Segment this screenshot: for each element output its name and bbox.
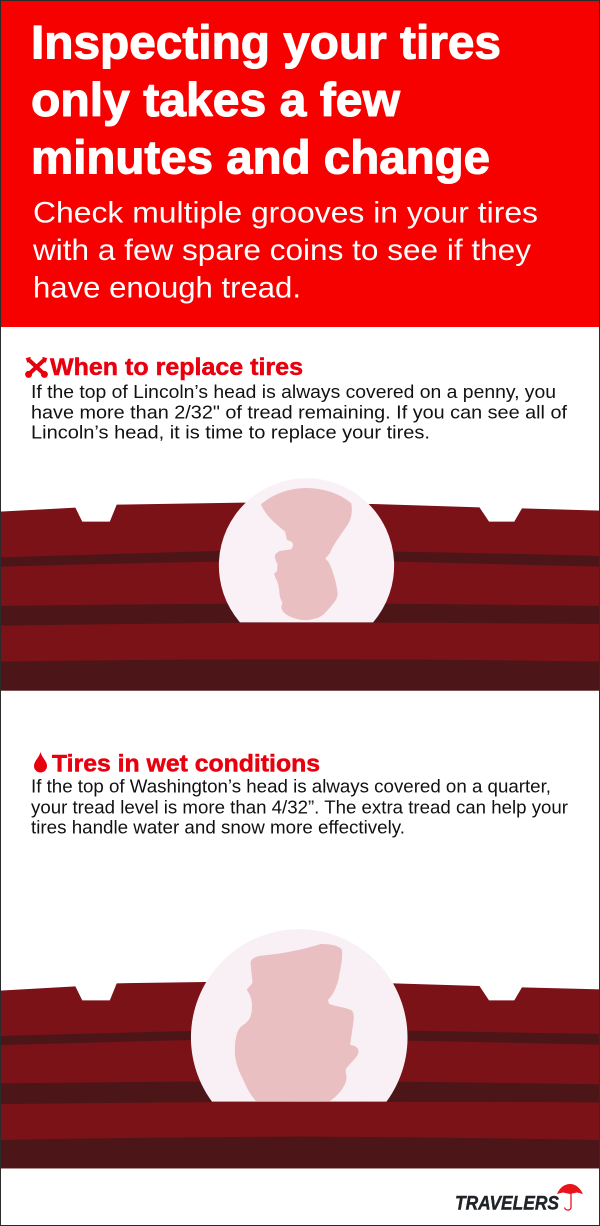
subtitle: [32, 197, 538, 304]
heading: tires in wet conditions: Tires in wet conditions: [52, 751, 320, 778]
body text: penny test: [31, 382, 568, 442]
coin: quarter: [191, 929, 408, 1102]
body text: penny test: Lincoln’s head, it is time to replace your tires.: [31, 422, 430, 442]
icon: crossed tools: [26, 358, 46, 376]
coin head: Lincoln: [261, 488, 352, 620]
illustration: penny in tire tread: [0, 478, 600, 691]
body text: quarter test: your tread level is more than 4/32”. The extra tread can help your: [31, 797, 568, 817]
tire groove: bottom: [0, 1137, 600, 1168]
tire body: [0, 503, 600, 691]
subtitle: with a few spare coins to see if they: [32, 234, 531, 267]
body text: quarter test: tires handle water and snow more effectively.: [31, 818, 405, 838]
tire groove: middle: [0, 1081, 600, 1104]
title: only takes a few: [31, 73, 400, 126]
icon: red umbrella: [557, 1184, 583, 1210]
tire groove: middle: [0, 603, 600, 626]
coin head: Washington: [235, 944, 359, 1102]
tire groove: thin: [0, 1031, 600, 1045]
title: minutes and change: [31, 130, 490, 184]
tire body: [0, 982, 600, 1168]
logo wordmark: TRAVELERS: [455, 1192, 559, 1214]
body text: penny test: If the top of Lincoln’s head is always covered on a penny, you: [31, 382, 556, 402]
header panel: [0, 0, 600, 327]
logo: Travelers: [455, 1184, 583, 1214]
body text: quarter test: If the top of Washington’s head is always covered on a quarter,: [31, 777, 551, 797]
illustration: quarter in tire tread: [0, 929, 600, 1168]
heading: when to replace tires: When to replace tires: [50, 354, 303, 381]
tire groove: thin: [0, 551, 600, 567]
subtitle: have enough tread.: [33, 271, 301, 304]
title: [31, 16, 501, 184]
body text: quarter test: [31, 777, 568, 838]
section: when to replace tires: [26, 354, 568, 442]
coin: penny: [219, 478, 394, 622]
section: tires in wet conditions: [31, 751, 568, 838]
title: Inspecting your tires: [31, 16, 501, 68]
subtitle: Check multiple grooves in your tires: [33, 197, 538, 230]
icon: water drop: [34, 752, 47, 773]
body text: penny test: have more than 2/32" of tread remaining. If you can see all of: [31, 402, 568, 422]
tire groove: bottom: [0, 659, 600, 691]
